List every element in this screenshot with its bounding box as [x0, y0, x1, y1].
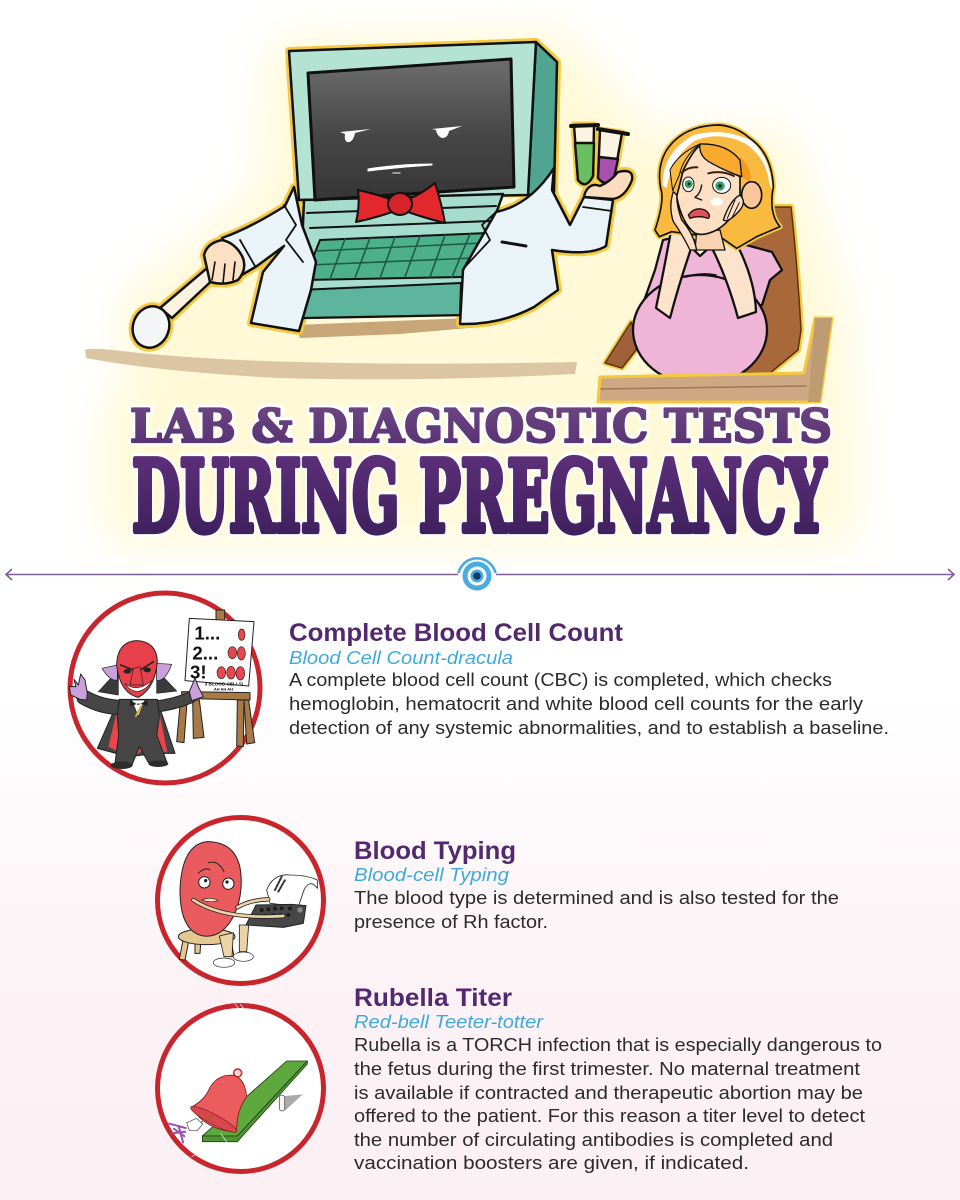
arms [656, 218, 756, 318]
seesaw [202, 1061, 307, 1136]
computer doctor character [127, 42, 632, 353]
typewriter [246, 904, 306, 927]
head with blonde hair and worried face [655, 125, 780, 250]
title white halo: DURING PREGNANCY [132, 439, 827, 555]
computer vents and keyboard [299, 206, 496, 318]
monitor screen with face [308, 59, 514, 200]
suit [115, 699, 167, 765]
bow tie [356, 183, 445, 223]
eyes [199, 877, 210, 888]
swab and hand [127, 240, 244, 353]
heading: Blood Typing [354, 837, 516, 865]
shoes [111, 762, 133, 769]
chair [605, 207, 801, 373]
ears and collar [98, 670, 118, 695]
description: Rubella is a TORCH infection that is especially dangerous to [354, 1035, 882, 1055]
hand holding test tubes [571, 125, 632, 199]
table shadow stripe [85, 349, 577, 379]
cape [97, 708, 175, 757]
divider with arrowheads [6, 569, 954, 580]
desk [598, 318, 832, 402]
pregnant patient on chair [598, 125, 832, 402]
description: presence of Rh factor. [354, 912, 548, 932]
head [117, 641, 157, 697]
arms [193, 900, 283, 917]
description: vaccination boosters are given, if indicated. [354, 1153, 749, 1173]
legs and shoes [219, 925, 249, 957]
description: the number of circulating antibodies is completed and [354, 1130, 833, 1150]
gloves [69, 674, 87, 700]
circle icon: dracula with blood cell chart [69, 593, 260, 783]
title line one: LAB & DIAGNOSTIC TESTS [130, 399, 832, 453]
seesaw shadow and post [278, 1094, 303, 1111]
chart board: AH AH AH. [214, 686, 234, 691]
title line two: DURING PREGNANCY [132, 439, 827, 555]
heading: Rubella Titer [354, 984, 512, 1012]
bell [234, 1069, 242, 1077]
title white halo: LAB & DIAGNOSTIC TESTS [130, 399, 832, 453]
stool [178, 929, 235, 960]
description: offered to the patient. For this reason a titer level to detect [354, 1106, 865, 1126]
chart board [185, 618, 254, 691]
description [354, 1035, 882, 1173]
shadow under computer [295, 318, 492, 338]
bean body [180, 842, 241, 936]
description: detection of any systemic abnormalities, and to establish a baseline. [289, 718, 889, 738]
description [289, 670, 889, 738]
monitor casing [289, 42, 557, 318]
gold outline halo [127, 42, 632, 353]
title: lab and diagnostic tests during pregnancy [130, 399, 832, 555]
chart board: 3! [190, 661, 207, 682]
lab coat [222, 168, 613, 331]
section: rubella titer [158, 984, 882, 1173]
easel [177, 610, 255, 747]
icon: eye logo [458, 556, 496, 594]
chart board: 2... [192, 643, 218, 664]
chart board: 1... [194, 623, 220, 644]
subtitle: Red-bell Teeter-totter [354, 1012, 544, 1032]
description: A complete blood cell count (CBC) is completed, which checks [289, 670, 832, 690]
arms [84, 697, 125, 707]
heading: Complete Blood Cell Count [289, 619, 624, 647]
description: The blood type is determined and is also tested for the [354, 888, 839, 908]
description [354, 888, 839, 932]
subtitle: Blood-cell Typing [354, 865, 509, 885]
circle icon: red bell on teeter-totter [158, 1004, 324, 1172]
section: complete blood cell count [69, 593, 889, 783]
subtitle: Blood Cell Count-dracula [289, 648, 513, 668]
chart board: 3 BLOOD CELLS! [205, 681, 244, 686]
paper [267, 875, 317, 907]
clapper and string [200, 1115, 213, 1123]
ring scratches [192, 1004, 243, 1157]
description: hemoglobin, hematocrit and white blood cell counts for the early [289, 694, 863, 714]
dress and belly [633, 236, 782, 385]
section: blood typing [158, 818, 839, 984]
yellow glow behind illustration and title [105, 30, 855, 545]
circle icon: bean at typewriter [158, 818, 324, 984]
illustration: computer doctor and pregnant patient [85, 42, 832, 402]
description: is available if contracted and therapeutic abortion may be [354, 1083, 863, 1103]
description: the fetus during the first trimester. No maternal treatment [354, 1059, 860, 1079]
title white halo [130, 399, 832, 555]
